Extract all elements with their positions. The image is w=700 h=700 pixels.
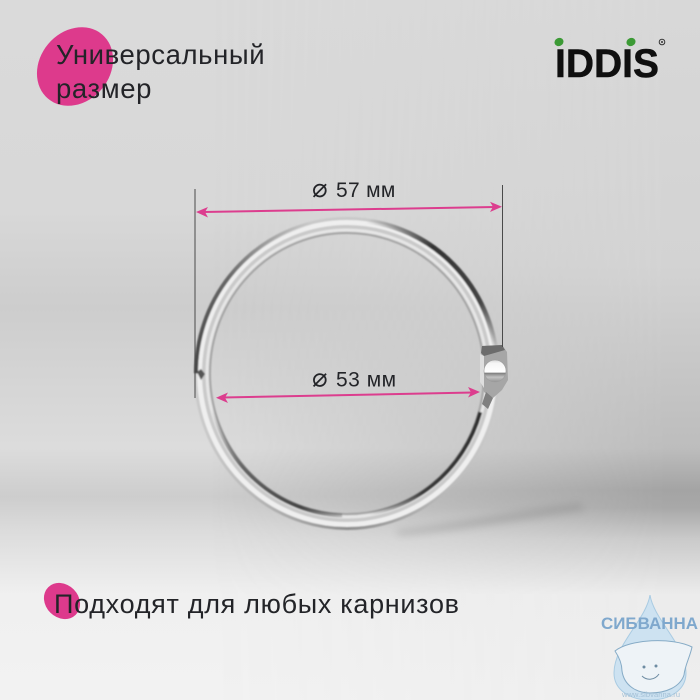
heading: universal size: Универсальный [56,39,265,70]
label: 57 mm [312,173,396,203]
watermark: Sibvanna: www.sibvanna.ru [621,690,680,699]
accent blob: top heading [36,27,114,106]
label: 53 mm: 53 мм [336,368,397,392]
arrow: inner diameter [216,387,480,403]
heading: universal size [56,39,265,104]
metal ring [196,218,498,528]
extension line left [194,189,196,398]
label: 53 mm: ⌀ [312,362,328,392]
label: 57 mm: ⌀ [312,173,328,203]
watermark: Sibvanna [601,595,698,700]
caption: fits any rods: Подходят для любых карнизов [54,589,460,619]
ring clasp [480,345,508,409]
extension line right [502,185,504,347]
heading: universal size: размер [56,73,152,104]
watermark: Sibvanna: СИБВАННА [601,615,698,633]
label: 57 mm: 57 мм [336,179,396,202]
arrow: outer diameter [196,202,502,218]
label: 53 mm [312,362,397,392]
accent blob: bottom caption [44,582,80,620]
shaded segments, set by dash offset around the ellipse [196,220,498,528]
background: soft studio gradient [0,291,700,700]
